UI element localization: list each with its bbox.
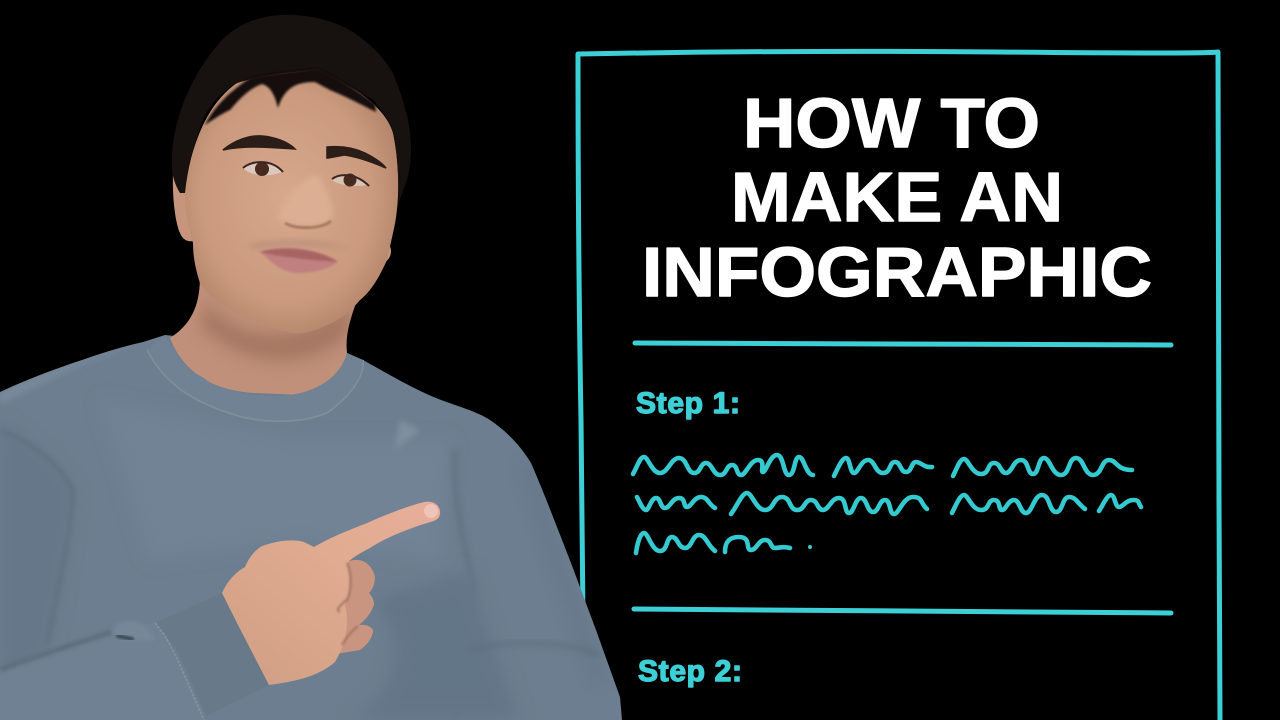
heading: MAKE AN (731, 158, 1063, 236)
nostril shadow (285, 221, 331, 228)
fingers curled (330, 560, 375, 655)
person pointing at the infographic (0, 15, 640, 720)
eye left (243, 162, 283, 176)
nose (278, 175, 333, 228)
sweater body (0, 320, 640, 720)
head (172, 15, 411, 333)
hair (172, 15, 411, 205)
eyebrow left (223, 136, 295, 150)
heading: INFOGRAPHIC (642, 233, 1152, 311)
mouth (260, 249, 338, 273)
hand back and index finger (222, 502, 440, 685)
step 1 scribbled body text (633, 455, 1141, 553)
fingernail (424, 504, 438, 518)
eye right (332, 174, 369, 186)
pointing hand (222, 502, 440, 685)
ear right (376, 245, 391, 263)
divider: under heading (635, 343, 1171, 345)
step 2 label: Step 2: (638, 655, 742, 688)
ear left (173, 173, 197, 241)
heading: HOW TO (743, 84, 1040, 162)
collar seam (147, 350, 363, 421)
hair fringe strands (205, 68, 376, 125)
heading (642, 84, 1152, 311)
neck shadow (200, 300, 352, 360)
divider: above step 2 (634, 609, 1171, 613)
upper lip (260, 249, 338, 262)
panel: hand-drawn infographic frame (578, 51, 1220, 720)
face (185, 70, 398, 333)
moustache shade (250, 239, 352, 250)
step 1 label: Step 1: (636, 387, 740, 420)
cuff seam (155, 623, 204, 720)
eyebrow right (327, 147, 386, 168)
sweater cuff (155, 593, 269, 716)
sweater collar (147, 335, 363, 422)
neck (170, 275, 357, 395)
knuckle shadows (338, 563, 358, 645)
